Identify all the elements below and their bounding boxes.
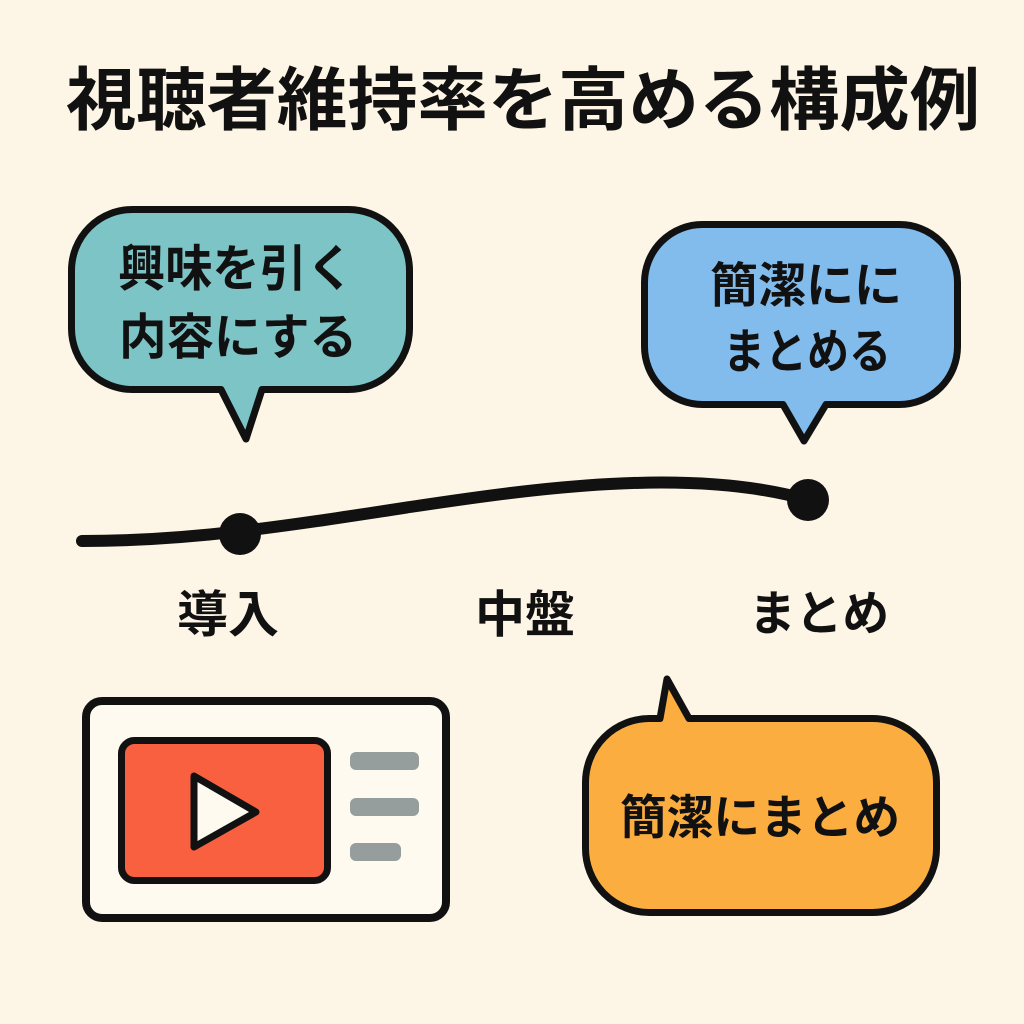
callout: summary bottom: [585, 679, 937, 913]
callout: summary top: まとめる: [723, 326, 891, 379]
label: middle: 中盤: [475, 587, 575, 643]
curve point: intro: [219, 513, 261, 555]
title: 視聴者維持率を高める構成例: [66, 62, 980, 139]
text lines: [350, 752, 419, 861]
label: summary: まとめ: [749, 588, 889, 641]
label: intro: 導入: [177, 587, 279, 643]
callout: summary top: 簡潔にに: [710, 260, 902, 313]
callout: intro: 興味を引く: [118, 241, 354, 297]
curve point: summary: [787, 479, 829, 521]
video player icon: [86, 701, 446, 918]
callout: summary bottom: 簡潔にまとめ: [620, 791, 900, 844]
callout: summary top: [644, 224, 958, 441]
video thumbnail: [122, 740, 328, 880]
retention curve: [82, 479, 829, 555]
play triangle: [194, 776, 256, 847]
callout: intro: [72, 209, 410, 439]
callout: intro: 内容にする: [119, 311, 357, 365]
